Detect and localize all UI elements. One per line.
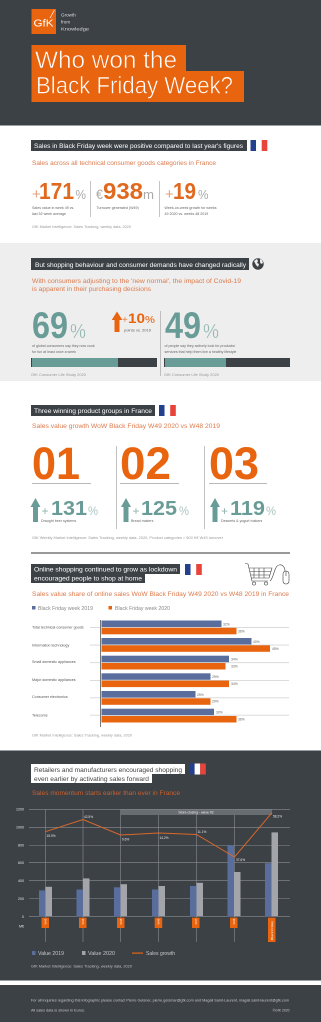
row: major domestic appliances: Major domestic appliances: [32, 678, 76, 682]
icon: French flag: [185, 564, 202, 575]
group 01: [30, 438, 98, 523]
callout: +10% points vs 2019: points vs. 2019: [124, 328, 151, 332]
line: sales growth: [46, 813, 272, 857]
bars: value 2020: [46, 832, 278, 916]
icon: French flag: [189, 764, 206, 774]
heading: [31, 405, 155, 416]
legend: [32, 951, 175, 957]
stat: 49%: 49: [165, 305, 201, 346]
bars: value 2019: [39, 845, 272, 916]
logo tagline: Knowledge: [61, 26, 90, 32]
progress bar: 49%: [164, 358, 290, 367]
stat: 69%: [32, 305, 95, 354]
progress bar: 69%: [31, 358, 157, 367]
legend: Sales growth: [146, 951, 175, 957]
stat: €938m: €: [96, 186, 103, 202]
heading: [31, 140, 247, 151]
subheading: is apparent in their purchasing decisions: [32, 286, 152, 293]
combo chart: weekly value and sales growth: [16, 808, 290, 942]
axis labels: 600: [18, 861, 24, 865]
row: small domestic appliances: [32, 656, 238, 670]
callout: +10% points vs 2019: [112, 310, 155, 332]
stat: +171%: +: [32, 186, 41, 203]
stat: +19%: 19: [173, 178, 196, 204]
stat: €938m: 938: [103, 178, 143, 204]
stat: 49%: %: [203, 321, 219, 343]
logo: GfK: GfK: [34, 18, 54, 30]
logo tagline: [61, 12, 90, 32]
stat: +171%: [32, 178, 86, 216]
week tags: W44: [81, 918, 85, 924]
row: total technical consumer goods: 32%: [223, 622, 230, 626]
row: information technology: [32, 638, 279, 652]
stat: +171%: Sales value in week 49 vs.: [32, 206, 74, 210]
group 03: [209, 438, 276, 523]
week tags: W46: [157, 918, 161, 924]
growth labels: 42.5%: [84, 815, 93, 819]
source: GfK Weekly Market Intelligence: Sales Tracking, weekly data, 2020, Product categories > 500 K€ W49 turnover: [32, 536, 224, 540]
group 02: [120, 438, 189, 523]
stat: 49%: services that help them live a healthy lifestyle: [164, 350, 236, 354]
callout: +10% points vs 2019: 10: [128, 310, 145, 326]
callout: +10% points vs 2019: %: [145, 315, 155, 326]
heading: [31, 258, 249, 270]
stat: +19%: [164, 178, 217, 216]
panel: sales in Black Friday week: [0, 125, 321, 243]
axis labels: [16, 808, 24, 928]
heading: encouraged people to shop at home: [34, 576, 142, 582]
row: total technical consumer goods: 36%: [238, 630, 245, 634]
growth labels: 37.6%: [236, 858, 245, 862]
bar chart: online share: [32, 620, 289, 727]
store closing band: [120, 810, 272, 815]
heading: Online shopping continued to grow as lockdown: [34, 566, 177, 574]
row: information technology: Information technology: [32, 644, 69, 648]
row: small domestic appliances: Small domestic appliances: [32, 660, 76, 664]
stat: +171%: 171: [39, 178, 74, 204]
legend: Value 2019: [38, 951, 64, 957]
row: small domestic appliances: 33%: [231, 664, 238, 668]
subheading: Sales value share of online sales WoW Black Friday W49 2020 vs W48 2019 in France: [32, 591, 289, 598]
stat: 49%: [164, 305, 236, 354]
group 02: +: [132, 504, 140, 518]
panel: header: [0, 0, 321, 125]
stat: +171%: %: [76, 187, 86, 202]
heading: Three winning product groups in France: [34, 408, 152, 415]
heading: [31, 764, 185, 783]
title: Who won the: [35, 47, 177, 74]
stat: 69%: 69: [32, 305, 68, 346]
row: information technology: 40%: [253, 640, 260, 644]
week tags: W45: [119, 918, 123, 924]
row: telecoms: 30%: [216, 710, 223, 714]
group 02: 02: [120, 438, 171, 489]
source right: GfK Consumer Life Study 2020: [164, 373, 219, 377]
week tags: W43: [44, 918, 48, 924]
axis labels: M€: [19, 924, 24, 928]
legend: Value 2020: [88, 951, 115, 957]
group 03: %: [266, 504, 276, 518]
stat: 69%: of global consumers say they now cook: [32, 344, 95, 348]
group 01: %: [88, 504, 98, 518]
group 01: Draught beer systems: [41, 519, 76, 523]
panel: three winning product groups: [0, 390, 321, 555]
subheading: Sales momentum starts earlier than ever in France: [32, 790, 180, 797]
title: Black Friday Week?: [36, 72, 233, 100]
stat: +19%: %: [198, 187, 209, 202]
panel: footer: [0, 985, 321, 1022]
store closing band: Store closing - wave #2: [178, 811, 214, 815]
row: telecoms: [32, 709, 245, 722]
growth labels: 58.2%: [273, 814, 282, 818]
source left: GfK Consumer Life Study 2020: [31, 373, 86, 377]
logo tagline: from: [61, 20, 70, 24]
panel: shopping behaviour: [0, 243, 321, 381]
group 01: +: [42, 504, 49, 518]
source: GfK Market Intelligence: Sales Tracking, weekly data, 2020: [32, 225, 131, 229]
heading: But shopping behaviour and consumer demands have changed radically: [35, 262, 247, 269]
group 02: 125: [141, 498, 177, 520]
stat: +19%: 49 2020 vs. weeks 48 2019: [164, 212, 208, 216]
row: telecoms: 36%: [238, 718, 245, 722]
icon: shopping cart and mouse: [245, 564, 289, 585]
currency note: All sales data is shown in Euros.: [31, 1008, 85, 1012]
stat: €938m: Turnover generated (W49): [96, 206, 139, 210]
group 01: 131: [51, 498, 87, 520]
week tags: W48: [232, 918, 236, 924]
row: total technical consumer goods: [32, 620, 245, 634]
group 03: +: [221, 504, 228, 518]
subheading: With consumers adjusting to the 'new normal', the impact of Covid-19: [32, 278, 241, 285]
growth labels: 11.1%: [198, 830, 206, 834]
stat: 49%: of people say they actively look for products/: [164, 344, 235, 348]
title: [32, 45, 244, 102]
row: consumer electronics: 29%: [212, 700, 219, 704]
week tags: Black Friday: [270, 920, 274, 940]
axis labels: 200: [18, 897, 24, 901]
growth labels: 15.9%: [46, 834, 56, 838]
icon: globe: [252, 258, 264, 270]
subheading: Sales value growth WoW Black Friday W49 2020 vs W48 2019: [32, 423, 220, 430]
row: major domestic appliances: 34%: [231, 682, 238, 686]
contact text: For all inquiries regarding this infographic please contact Pierre Geisner, pierre.geismar@gfk.com and Magali Saint-Laurent, magali.saint-laurent@gfk.com: [31, 998, 289, 1002]
row: major domestic appliances: 29%: [212, 675, 219, 679]
callout: +10% points vs 2019: +: [122, 315, 128, 326]
legend: [32, 606, 170, 612]
row: major domestic appliances: [32, 673, 238, 687]
heading: even earlier by activating sales forward: [34, 776, 149, 783]
group 03: 119: [230, 498, 265, 520]
growth labels: 9.6%: [122, 838, 129, 842]
legend: Black Friday week 2020: [115, 606, 170, 612]
group 03: Desserts & yogurt makers: [221, 519, 263, 523]
week tags: W47: [194, 918, 198, 924]
stat: +19%: Week-on-week growth for weeks: [164, 206, 217, 210]
copyright: ©GfK 2020: [273, 1008, 290, 1012]
logo: GfK: [32, 9, 56, 34]
axis labels: 1200: [16, 808, 24, 812]
stat: €938m: m: [143, 187, 154, 202]
icon: French flag: [159, 405, 176, 416]
panel: online shopping: [0, 555, 321, 750]
logo tagline: Growth: [61, 12, 76, 18]
stat: 69%: %: [70, 321, 86, 343]
axis labels: 800: [18, 844, 24, 848]
row: small domestic appliances: 34%: [231, 658, 238, 662]
panel: sales forward: [0, 750, 321, 981]
group 02: Bread makers: [131, 519, 154, 523]
axis labels: 0: [22, 915, 24, 919]
legend: Black Friday week 2019: [38, 606, 93, 612]
row: consumer electronics: Consumer electronics: [32, 695, 68, 699]
group 01: 01: [32, 438, 80, 489]
week tags: [42, 918, 276, 942]
growth labels: 14.2%: [160, 836, 169, 840]
icon: French flag: [250, 140, 267, 151]
group 03: 03: [209, 438, 259, 489]
source: GfK Market Intelligence: Sales Tracking, weekly data, 2020: [31, 964, 132, 968]
growth labels: [46, 814, 282, 862]
subheading: [32, 278, 241, 293]
stat: +19%: +: [165, 186, 174, 203]
group 02: %: [179, 504, 189, 518]
axis labels: 1000: [16, 826, 24, 830]
row: total technical consumer goods: Total technical consumer goods: [32, 626, 84, 630]
heading: [31, 564, 180, 583]
row: consumer electronics: 25%: [197, 693, 204, 697]
stat: €938m: [96, 178, 154, 210]
subheading: Sales across all technical consumer goods categories in France: [32, 160, 216, 167]
stat: 69%: for fun at least once a week: [32, 350, 76, 354]
heading: Retailers and manufacturers encouraged shopping: [34, 767, 182, 774]
row: information technology: 45%: [272, 647, 279, 651]
stat: +171%: last 52 week average: [32, 212, 66, 216]
heading: Sales in Black Friday week were positive compared to last year's figures: [34, 143, 244, 150]
row: telecoms: Telecoms: [32, 714, 48, 718]
source: GfK Market Intelligence: Sales Tracking, weekly data, 2020: [32, 734, 132, 738]
row: consumer electronics: [32, 691, 219, 705]
axis labels: 400: [18, 879, 24, 883]
